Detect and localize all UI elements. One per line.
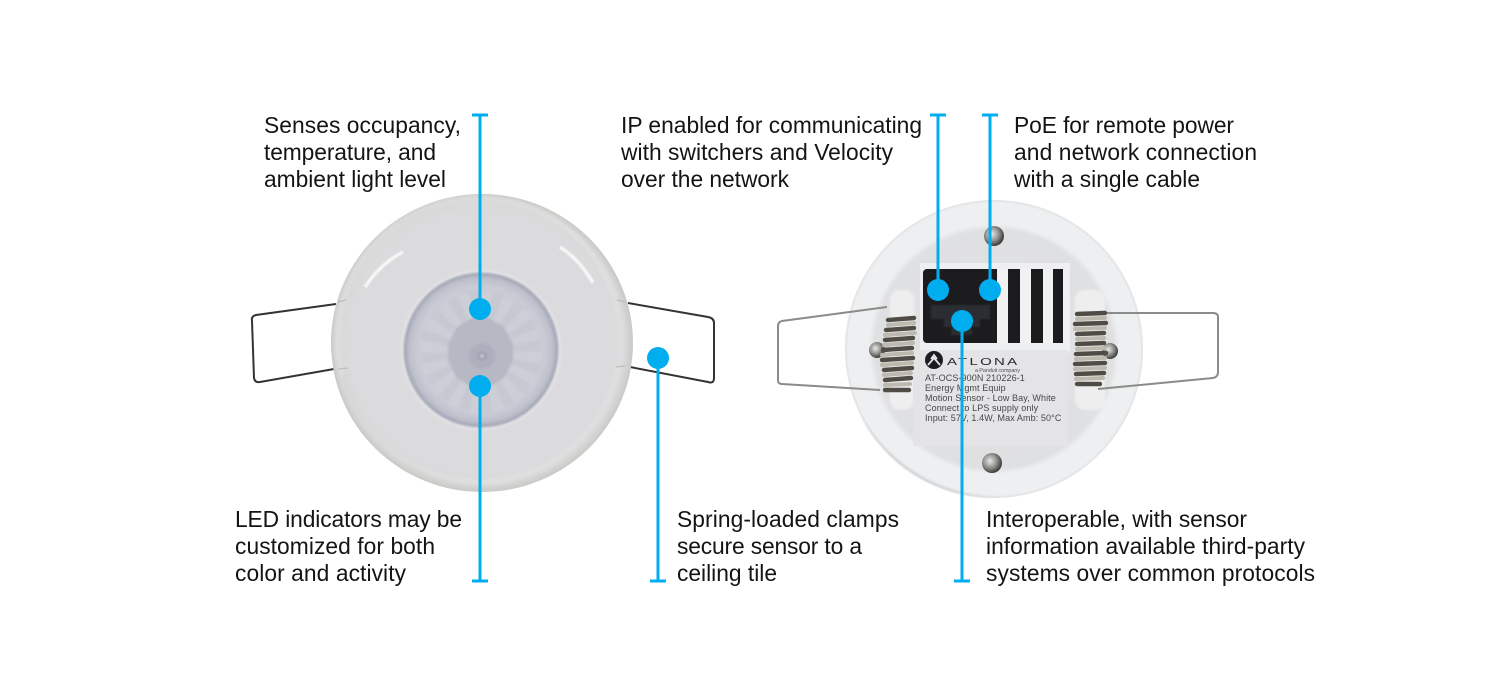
callout: interoperable: Interoperable, with sensor [986,506,1247,532]
callout: LED indicators: LED indicators may be [235,506,462,532]
icon: right wire clamp [1098,313,1218,389]
sensor housing [331,194,633,492]
icon: left wire clamp [252,304,336,382]
ethernet port and vents [923,269,1068,343]
callout: IP enabled: with switchers and Velocity [620,139,894,165]
icon: right wire clamp [628,303,714,382]
callout: IP enabled [620,112,949,301]
motion sensor lens [401,270,561,430]
label text: Input: 57V, 1.4W, Max Amb: 50°C [925,413,1062,423]
label text: Connect to LPS supply only [925,403,1039,413]
callout: LED indicators: customized for both [235,533,435,559]
icon: left spring [882,318,915,390]
icon: bottom screw [982,453,1002,473]
icon: right side screw [1102,343,1118,359]
callout: LED indicators: color and activity [235,560,407,586]
callout: IP enabled: IP enabled for communicating [621,112,922,138]
icon: left wire clamp [778,307,887,390]
icon: right spring [1075,313,1106,384]
callout: IP enabled: over the network [621,166,790,192]
callout: senses occupancy [264,112,491,320]
callout: PoE: with a single cable [1013,166,1200,192]
label text: Motion Sensor - Low Bay, White [925,393,1056,403]
icon: left side screw [869,342,885,358]
callout: PoE: and network connection [1014,139,1257,165]
label text: AT-OCS-900N 210226-1 [925,373,1025,383]
product label [913,350,1068,446]
icon: Atlona logo [926,352,942,368]
callout: PoE: PoE for remote power [1014,112,1234,138]
callout: senses occupancy: temperature, and [264,139,436,165]
callout: PoE [979,112,1257,301]
callout: LED indicators [235,375,491,586]
callout: spring-loaded clamps: secure sensor to a [677,533,862,559]
callout: senses occupancy: ambient light level [264,166,446,192]
label text: Energy Mgmt Equip [925,383,1006,393]
brand tagline: a Panduit company [975,368,1020,374]
callout: senses occupancy: Senses occupancy, [264,112,461,138]
brand name: ATLONA [947,356,1019,367]
callout: interoperable [951,310,1315,586]
icon: top screw [984,226,1004,246]
panel: sensor front view [252,194,714,492]
callout: interoperable: systems over common protocols [986,560,1315,586]
callout: spring-loaded clamps: Spring-loaded clamps [677,506,899,532]
rear housing [845,200,1143,498]
callout: interoperable: information available third-party [986,533,1306,559]
panel: sensor rear view [778,200,1218,498]
callout: spring-loaded clamps [647,347,899,586]
label text [925,373,1062,423]
callout: spring-loaded clamps: ceiling tile [677,560,777,586]
